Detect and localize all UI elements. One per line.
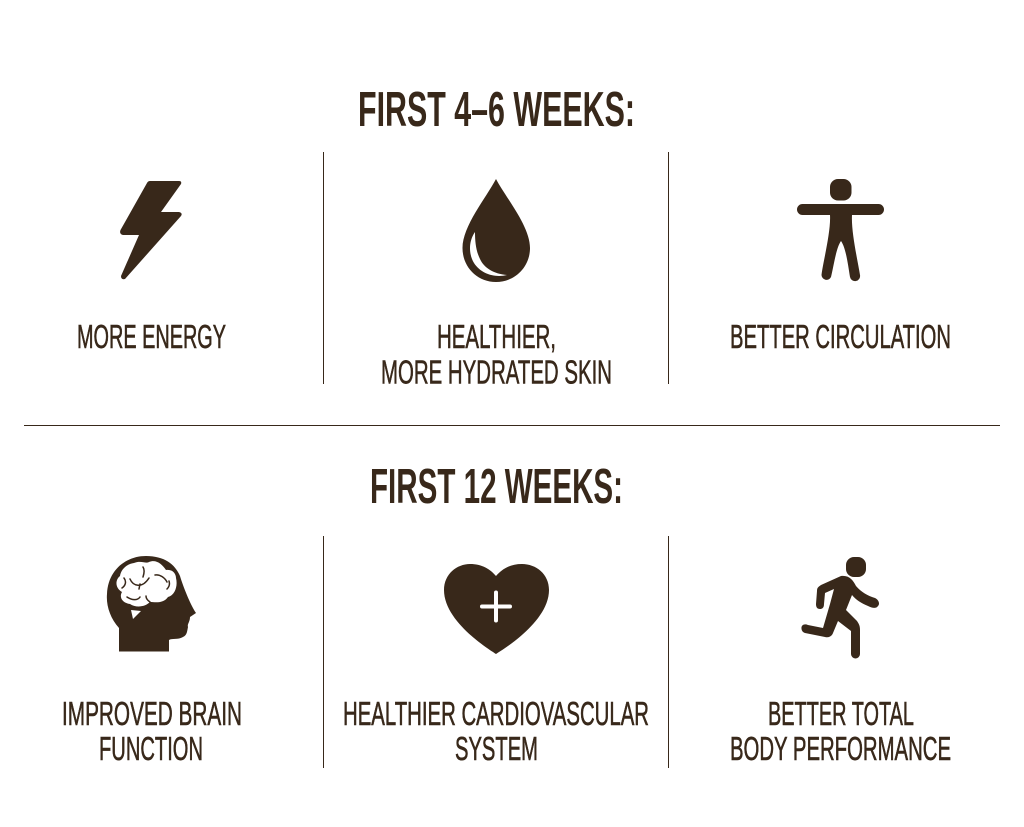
icon: running person xyxy=(801,557,879,658)
icon: lightning bolt xyxy=(120,181,182,279)
label: better total body performance: BETTER TOTAL xyxy=(768,695,914,732)
label: improved brain function: IMPROVED BRAIN xyxy=(62,695,242,732)
label: healthier, more hydrated skin xyxy=(381,318,612,390)
label: healthier, more hydrated skin: HEALTHIER, xyxy=(437,318,556,355)
label: improved brain function xyxy=(62,695,242,767)
label: healthier cardiovascular system: HEALTHIER CARDIOVASCULAR xyxy=(343,695,649,732)
heading: first 12 weeks: FIRST 12 WEEKS: xyxy=(370,460,623,514)
icon: head with brain xyxy=(107,556,196,652)
label: improved brain function: FUNCTION xyxy=(99,730,203,767)
heading: first 4-6 weeks: FIRST 4–6 WEEKS: xyxy=(358,83,635,137)
label: healthier, more hydrated skin: MORE HYDRATED SKIN xyxy=(381,354,612,390)
label: healthier cardiovascular system xyxy=(343,695,649,767)
label: better total body performance xyxy=(730,695,951,767)
label: healthier cardiovascular system: SYSTEM xyxy=(455,730,538,767)
label: more energy: MORE ENERGY xyxy=(77,318,226,355)
icon: water drop xyxy=(462,179,530,282)
icon: person with arms out xyxy=(797,179,884,281)
icon: heart with plus xyxy=(444,564,549,654)
